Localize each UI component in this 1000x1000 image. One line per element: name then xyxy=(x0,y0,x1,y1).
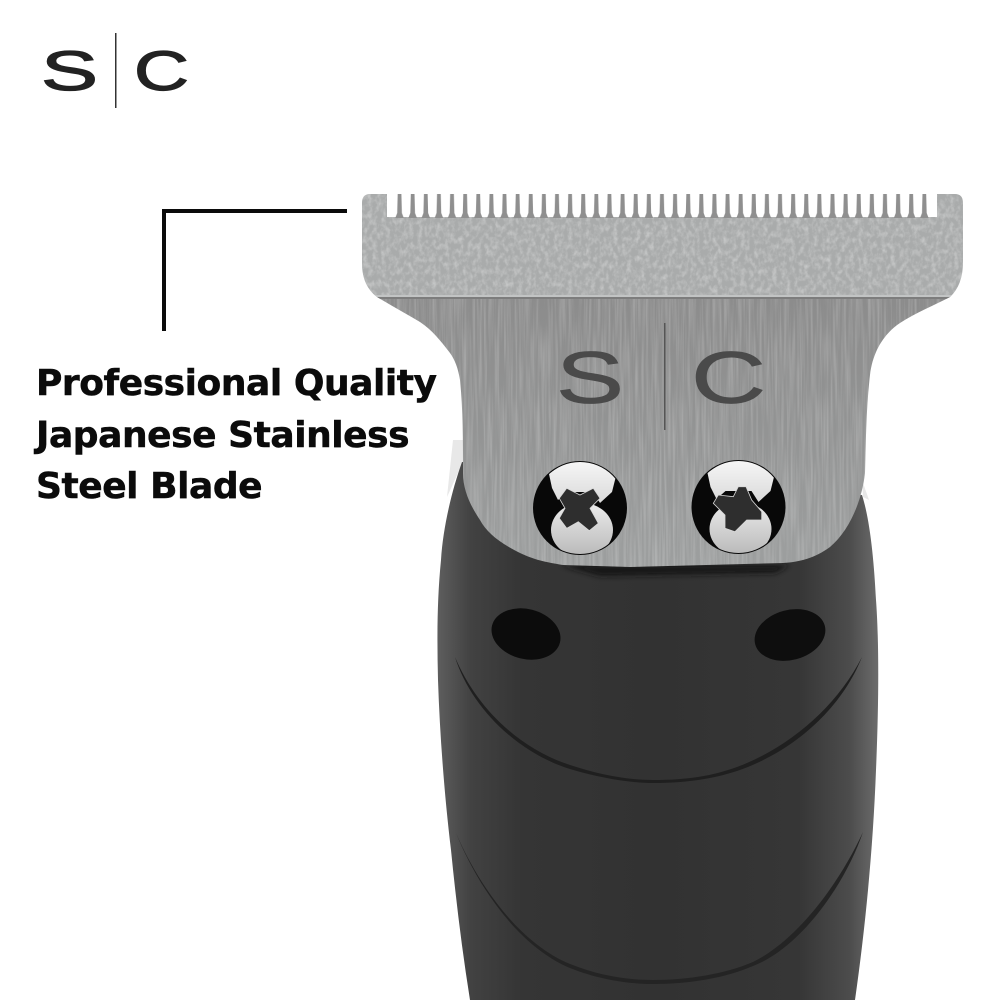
body groove upper xyxy=(455,657,862,783)
right body hole xyxy=(749,602,831,668)
blade logo: C xyxy=(691,338,766,419)
clipper body xyxy=(437,440,878,1000)
blade xyxy=(355,190,970,572)
body groove lower xyxy=(456,832,863,984)
logo xyxy=(41,33,189,108)
blade logo: S xyxy=(556,338,624,419)
callout text xyxy=(34,363,437,507)
callout bracket line xyxy=(164,211,347,331)
callout text: Japanese Stainless xyxy=(36,414,409,456)
blade teeth xyxy=(393,194,931,218)
callout text: Professional Quality xyxy=(36,363,437,404)
left body hole xyxy=(486,601,566,667)
logo: C xyxy=(134,39,189,102)
logo: S xyxy=(41,39,98,102)
left screw xyxy=(533,461,627,557)
callout text: Steel Blade xyxy=(36,466,262,507)
right screw xyxy=(692,460,786,556)
blade logo xyxy=(556,323,766,430)
